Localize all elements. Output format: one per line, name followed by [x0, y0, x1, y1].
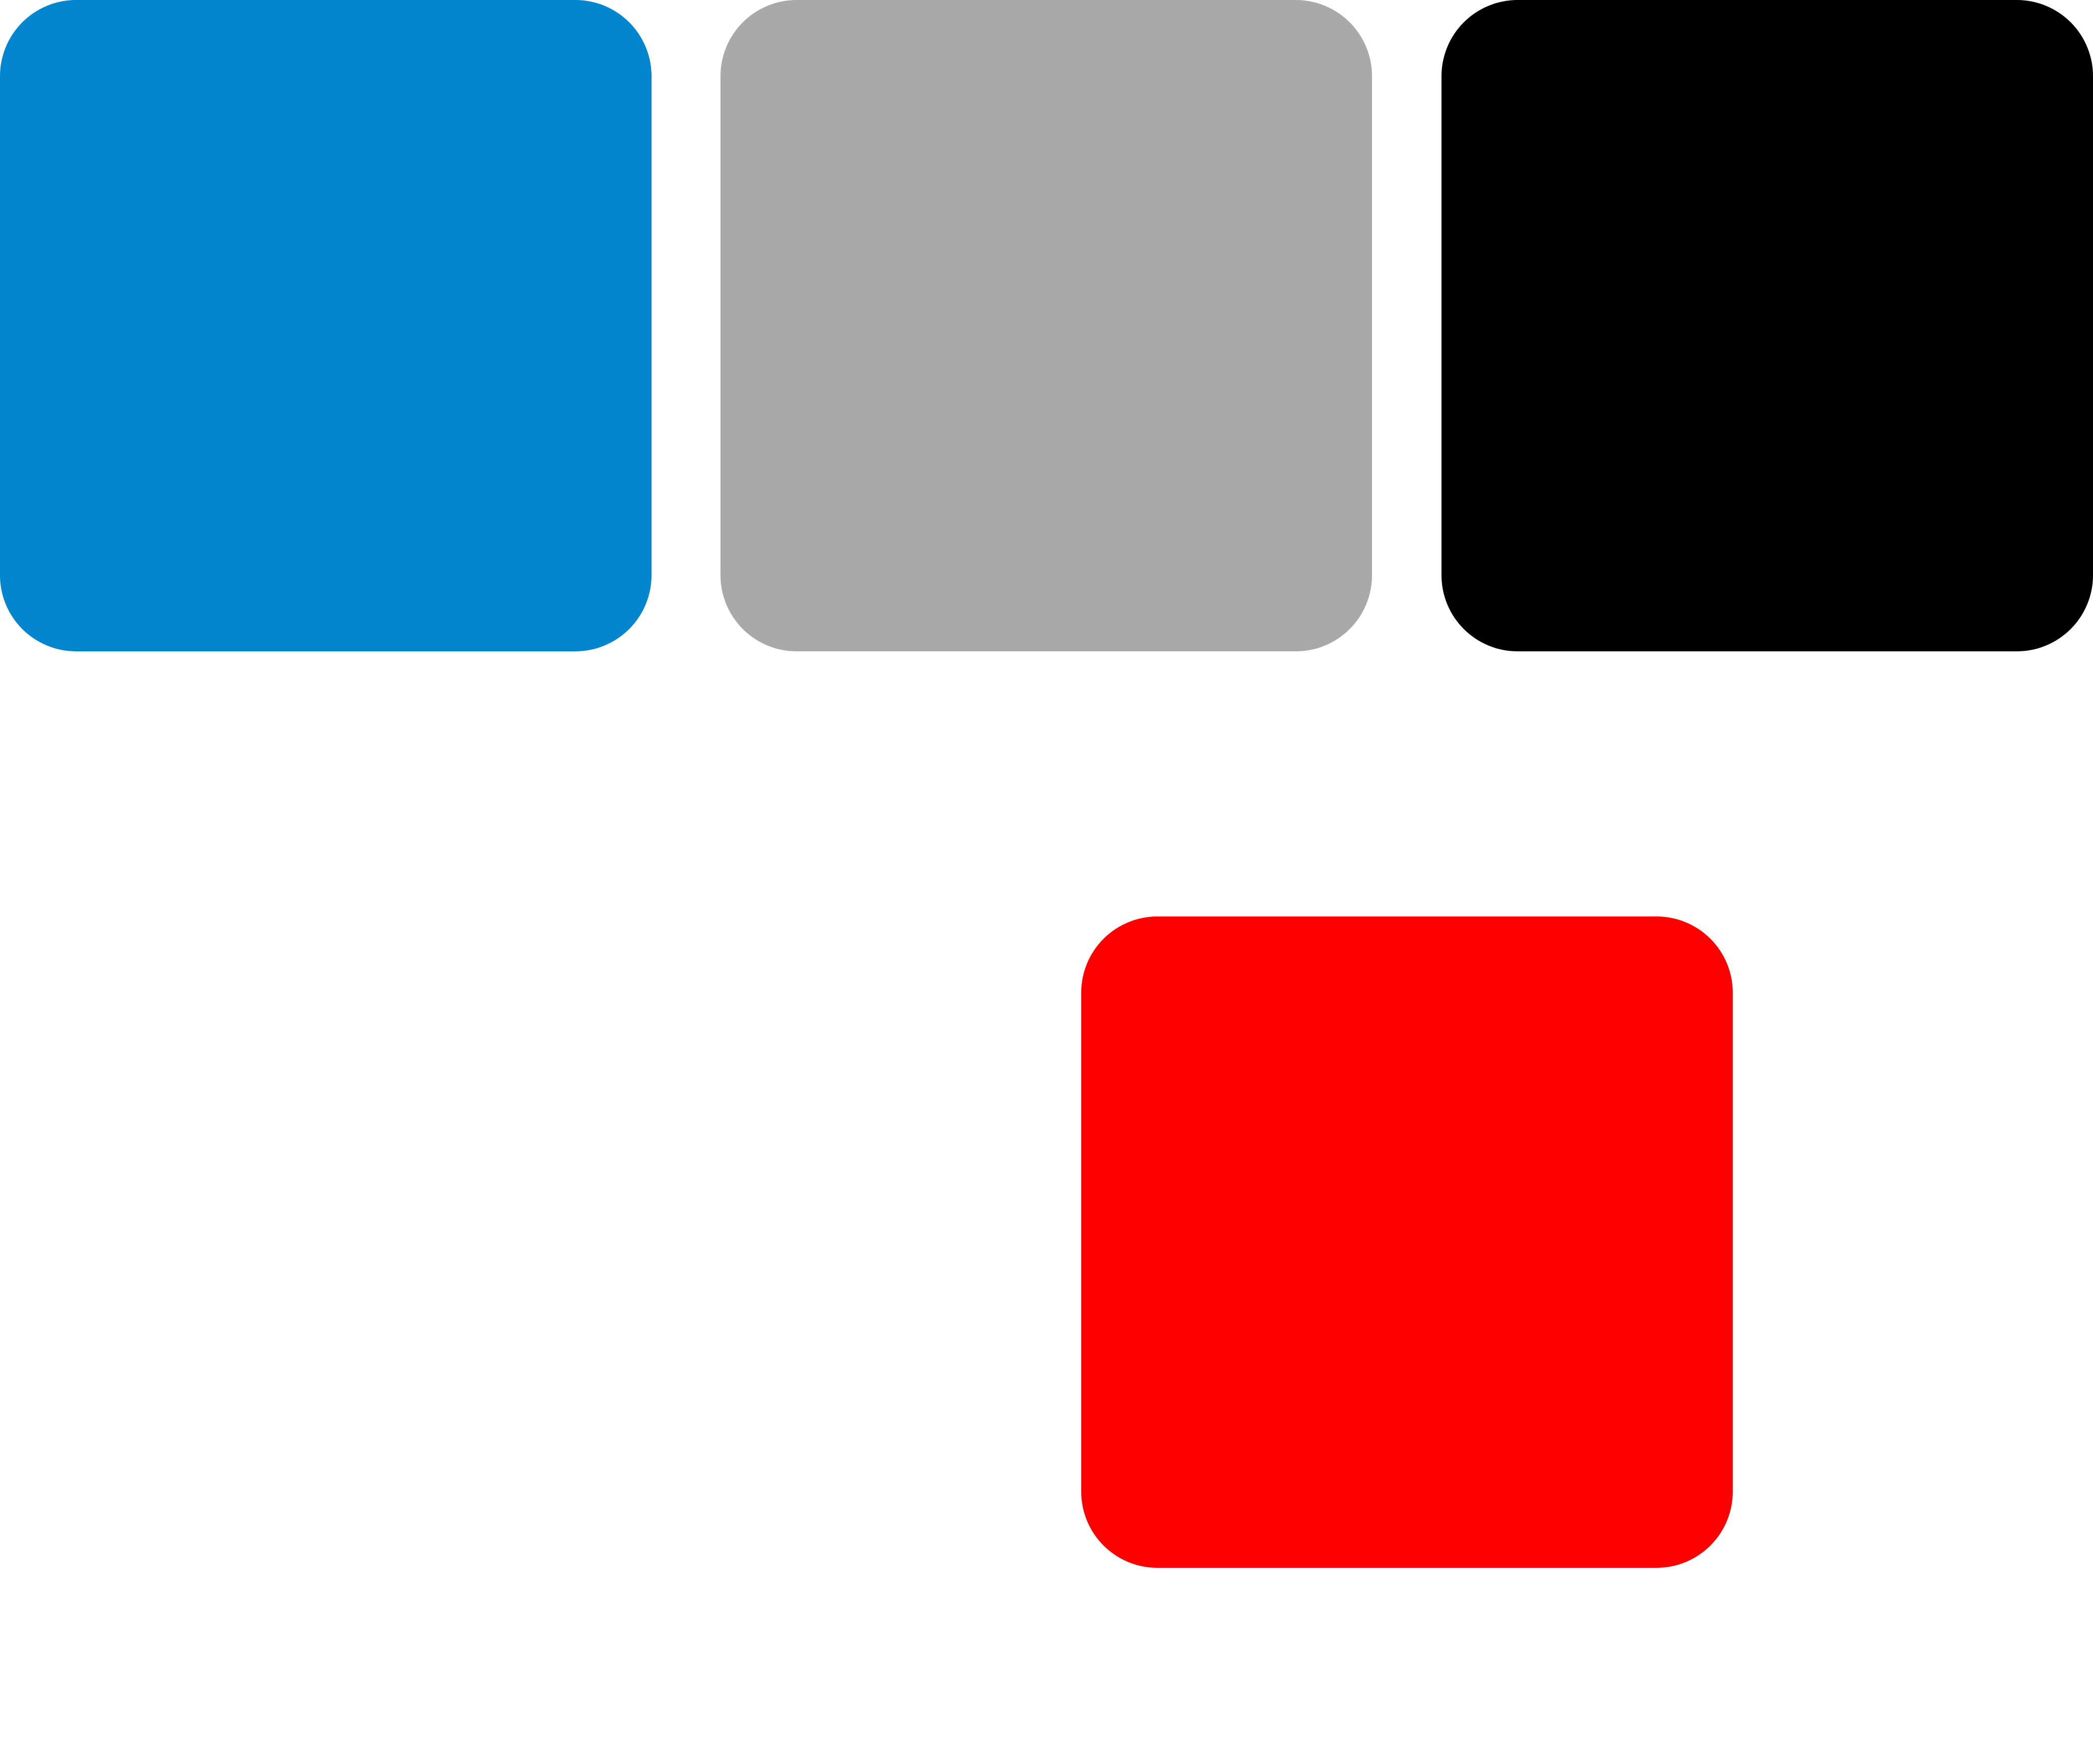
panel: gray square: [720, 0, 1372, 651]
panel: blue square: [0, 0, 652, 651]
panel: black square: [1441, 0, 2093, 651]
panel: red square: [1081, 916, 1733, 1568]
